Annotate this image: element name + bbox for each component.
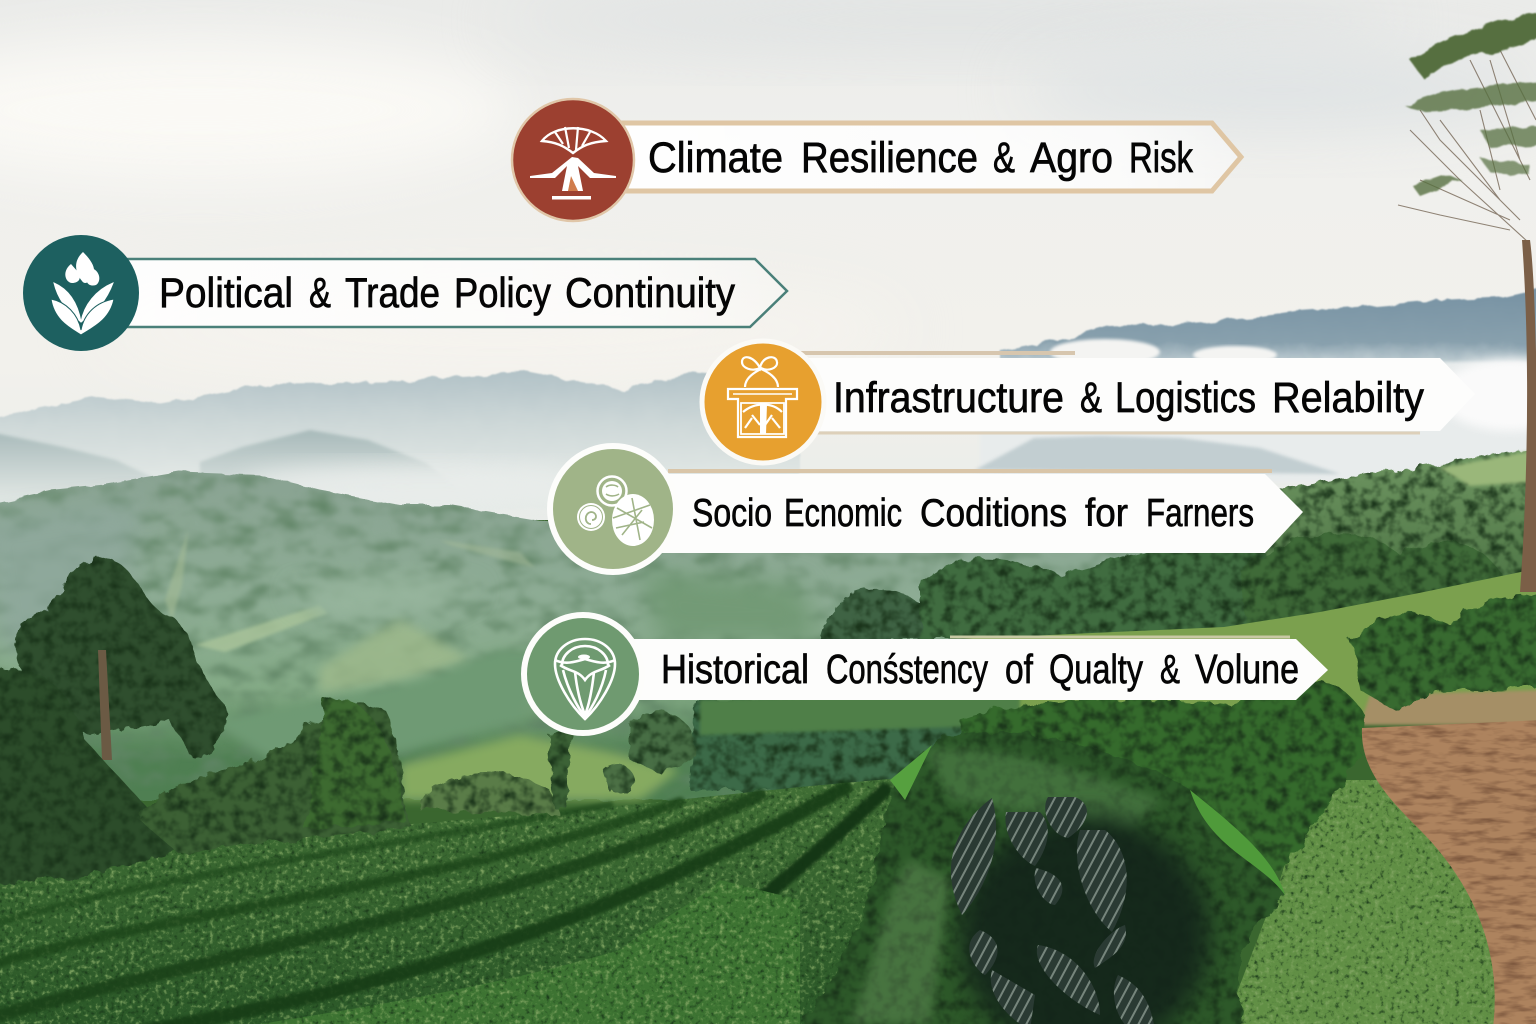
banner shape	[800, 353, 1475, 433]
heading text: Logistics	[1115, 374, 1256, 422]
heading text: Conśstency	[826, 646, 988, 692]
heading text: Political	[159, 269, 293, 316]
heading text	[648, 134, 1193, 182]
banner shape	[615, 123, 1241, 191]
heading text: Policy	[454, 269, 551, 316]
right hillside with trees	[700, 445, 1536, 735]
heading text: Continuity	[565, 269, 735, 316]
distant mountains left	[0, 372, 800, 510]
heading text: Farners	[1146, 492, 1254, 535]
coffee plant	[790, 732, 1285, 1024]
banner: political and trade policy	[23, 235, 787, 351]
banner shape	[630, 637, 1328, 700]
heading text: &	[1080, 374, 1102, 422]
heading text: Trade	[345, 269, 440, 316]
heading text: Coditions	[920, 492, 1067, 535]
heading text: Climate	[648, 134, 783, 182]
icon badge: red scale and tree	[512, 99, 634, 221]
heading text: Socio	[692, 492, 772, 535]
heading text: Agro	[1030, 134, 1113, 182]
hedge rows and bushes right	[960, 594, 1536, 900]
heading text: Ecnomic	[784, 492, 902, 535]
tall tree right	[1398, 12, 1536, 592]
icon badge: teal leaves	[23, 235, 139, 351]
dirt road	[1362, 720, 1536, 1024]
grass verge	[1225, 780, 1520, 1024]
heading text	[159, 269, 735, 316]
icon badge: green parachute pod	[524, 615, 642, 733]
sky	[0, 0, 1536, 520]
heading text: Historical	[661, 646, 809, 692]
heading text: Infrastructure	[833, 374, 1064, 422]
banner: historical consistency	[524, 615, 1328, 733]
heading text	[833, 374, 1424, 422]
left trees	[0, 558, 695, 885]
tea field rows	[0, 778, 900, 1024]
banner shape	[125, 259, 787, 327]
heading text: Volune	[1195, 646, 1299, 692]
heading text	[661, 646, 1299, 692]
heading text: of	[1005, 646, 1033, 692]
banner shape	[650, 471, 1303, 553]
heading text: for	[1085, 492, 1128, 535]
middle green hills	[0, 472, 1300, 800]
heading text: Resilience	[801, 134, 978, 182]
distant blue mountains right	[975, 288, 1536, 482]
banner: climate resilience	[512, 99, 1241, 221]
heading text: Qualty	[1049, 646, 1143, 692]
icon badge: sage green coffee beans	[550, 446, 676, 572]
heading text	[692, 492, 1254, 535]
heading text: &	[1160, 646, 1180, 692]
icon badge: orange lectern	[702, 341, 824, 463]
heading text: &	[993, 134, 1015, 182]
heading text: &	[309, 269, 331, 316]
heading text: Risk	[1129, 134, 1193, 182]
heading text: Relabilty	[1272, 374, 1424, 422]
banner: infrastructure and logistics	[702, 341, 1475, 463]
banner: socio economic conditions	[550, 446, 1303, 572]
